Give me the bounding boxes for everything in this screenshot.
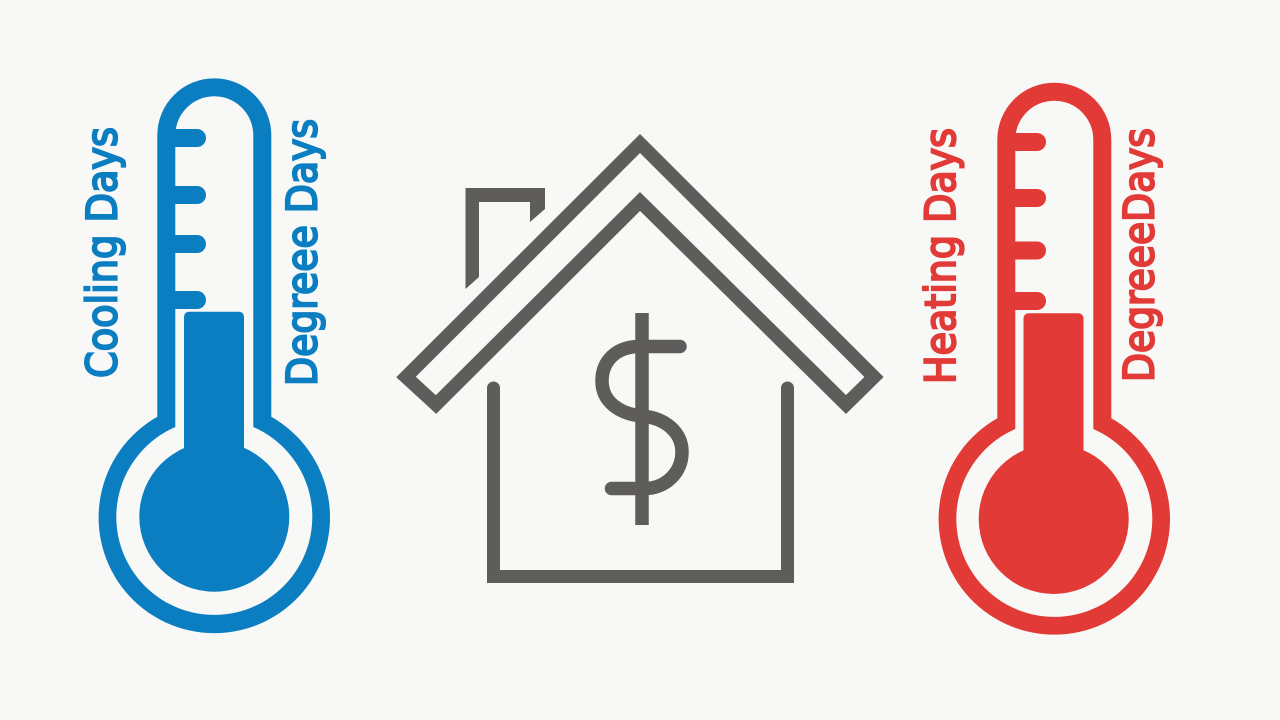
blue cooling thermometer <box>99 78 330 633</box>
mercury column and bulb: cooling <box>139 312 289 592</box>
thermometer interior: heating <box>956 101 1152 617</box>
mercury column and bulb: heating <box>979 313 1129 594</box>
red heating thermometer <box>939 83 1170 635</box>
label: Heating Days: Heating Days <box>916 128 965 384</box>
label: Degree Days (heating): DegreeeDays <box>1114 128 1163 382</box>
label: Cooling Days: Cooling Days <box>78 127 127 378</box>
thermometer outline: heating <box>939 83 1170 635</box>
walls <box>494 388 788 576</box>
tick marks: heating <box>1010 133 1046 310</box>
chimney <box>466 188 545 289</box>
tick marks: cooling <box>170 129 206 309</box>
dollar sign <box>602 313 682 525</box>
thermometer interior: cooling <box>116 96 312 615</box>
house icon <box>406 144 874 576</box>
roof <box>406 144 874 404</box>
thermometer outline: cooling <box>99 78 330 633</box>
label: Degree Days (cooling): Degreee Days <box>278 119 327 386</box>
